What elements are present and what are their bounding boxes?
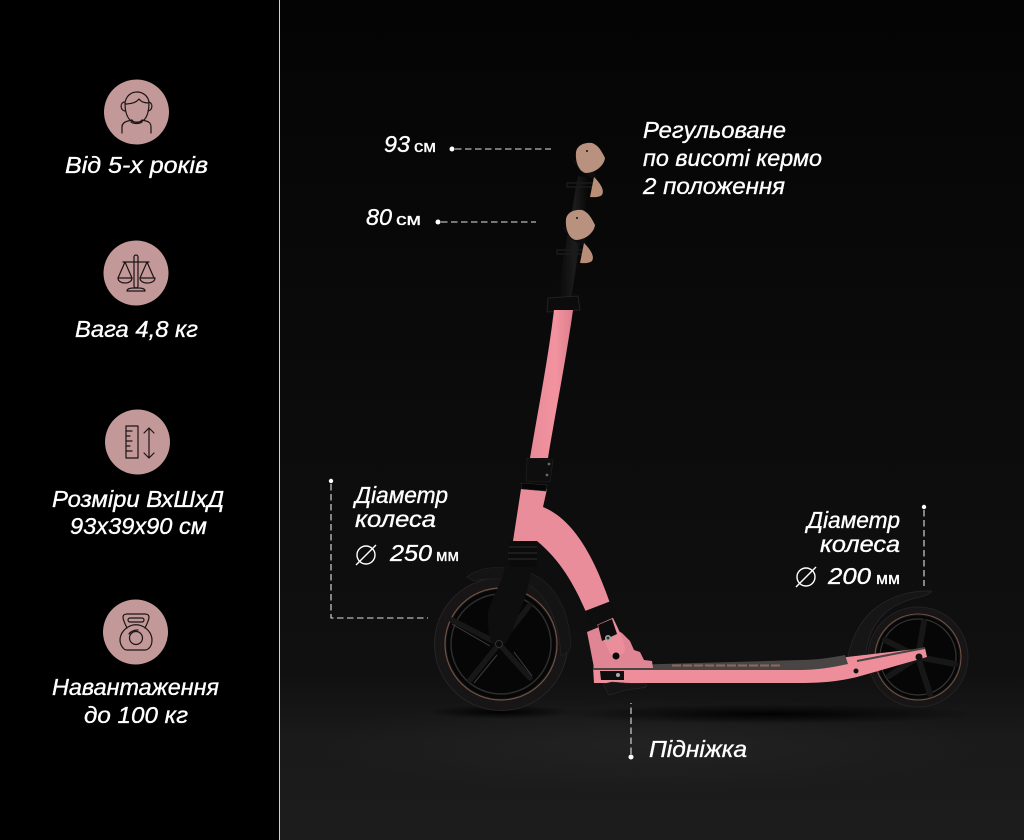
stem clamp: [547, 296, 580, 312]
kickstand: [600, 671, 647, 695]
callout: 93 cm: 93: [384, 131, 410, 157]
feature: age: [65, 80, 208, 178]
callout: front wheel diameter: 250: [389, 540, 432, 566]
rear wheel: [868, 607, 968, 707]
callout: front wheel diameter: [329, 479, 459, 618]
callout: rear wheel diameter: Діаметр: [804, 507, 900, 533]
callout: rear wheel diameter: [796, 505, 926, 589]
icon: kettlebell: [103, 600, 168, 664]
icon: ruler and arrow: [105, 410, 170, 474]
spring bellows: [508, 541, 537, 567]
sidebar panel: [0, 0, 280, 840]
folding bracket with teeth: [587, 624, 653, 668]
background panel: [280, 0, 1024, 840]
callout: handlebar height: по висоті кермо: [643, 145, 822, 171]
upper handlebar grips: [567, 143, 605, 197]
callout: kickstand: Підніжка: [649, 736, 747, 762]
stem lower pink: [530, 310, 573, 458]
deck: [593, 648, 927, 683]
callout: front wheel diameter: мм: [436, 546, 459, 565]
callout: front wheel diameter: Діаметр: [352, 482, 448, 508]
lower handlebar grips: [557, 210, 595, 263]
label: dimensions: Розміри ВхШхД: [52, 486, 224, 512]
callout: 93 cm: см: [414, 137, 436, 156]
icon: scales: [104, 240, 168, 306]
icon: diameter: [796, 567, 816, 587]
callout: handlebar height: 2 положення: [642, 173, 785, 199]
callout: 80 cm: [366, 204, 536, 230]
steering stem upper: [556, 176, 590, 300]
callout: front wheel diameter: колеса: [355, 506, 436, 532]
front wheel: [434, 578, 568, 710]
feature: load: до 100 кг: [84, 702, 188, 728]
callout: rear wheel diameter: мм: [876, 569, 900, 588]
rear fender: [847, 591, 932, 661]
callout: 80 cm: см: [396, 210, 421, 229]
front fork: [488, 567, 531, 647]
label: weight: Вага 4,8 кг: [75, 316, 198, 342]
feature: dimensions: [52, 410, 224, 539]
label: age: Від 5-х років: [65, 152, 208, 178]
callout: 80 cm: 80: [366, 204, 392, 230]
callout: handlebar height: [642, 117, 822, 199]
callout: rear wheel diameter: 200: [827, 563, 871, 589]
callout: kickstand: [628, 703, 747, 762]
feature: weight: [75, 240, 198, 342]
icon: child: [104, 80, 169, 144]
label: load: Навантаження: [52, 674, 219, 700]
feature: load: [52, 600, 219, 728]
folding clamp: [585, 601, 620, 660]
folding arm: [596, 616, 625, 656]
frame neck and arch: [513, 489, 610, 612]
head clamp: [521, 458, 553, 491]
front hub: [496, 640, 502, 648]
scooter illustration: [434, 143, 968, 710]
feature: dimensions: 93х39х90 см: [70, 513, 207, 539]
callout: rear wheel diameter: колеса: [820, 531, 900, 557]
icon: diameter: [356, 545, 376, 565]
callout: 93 cm: [384, 131, 551, 157]
front fender: [467, 568, 571, 656]
callout: handlebar height: Регульоване: [643, 117, 786, 143]
